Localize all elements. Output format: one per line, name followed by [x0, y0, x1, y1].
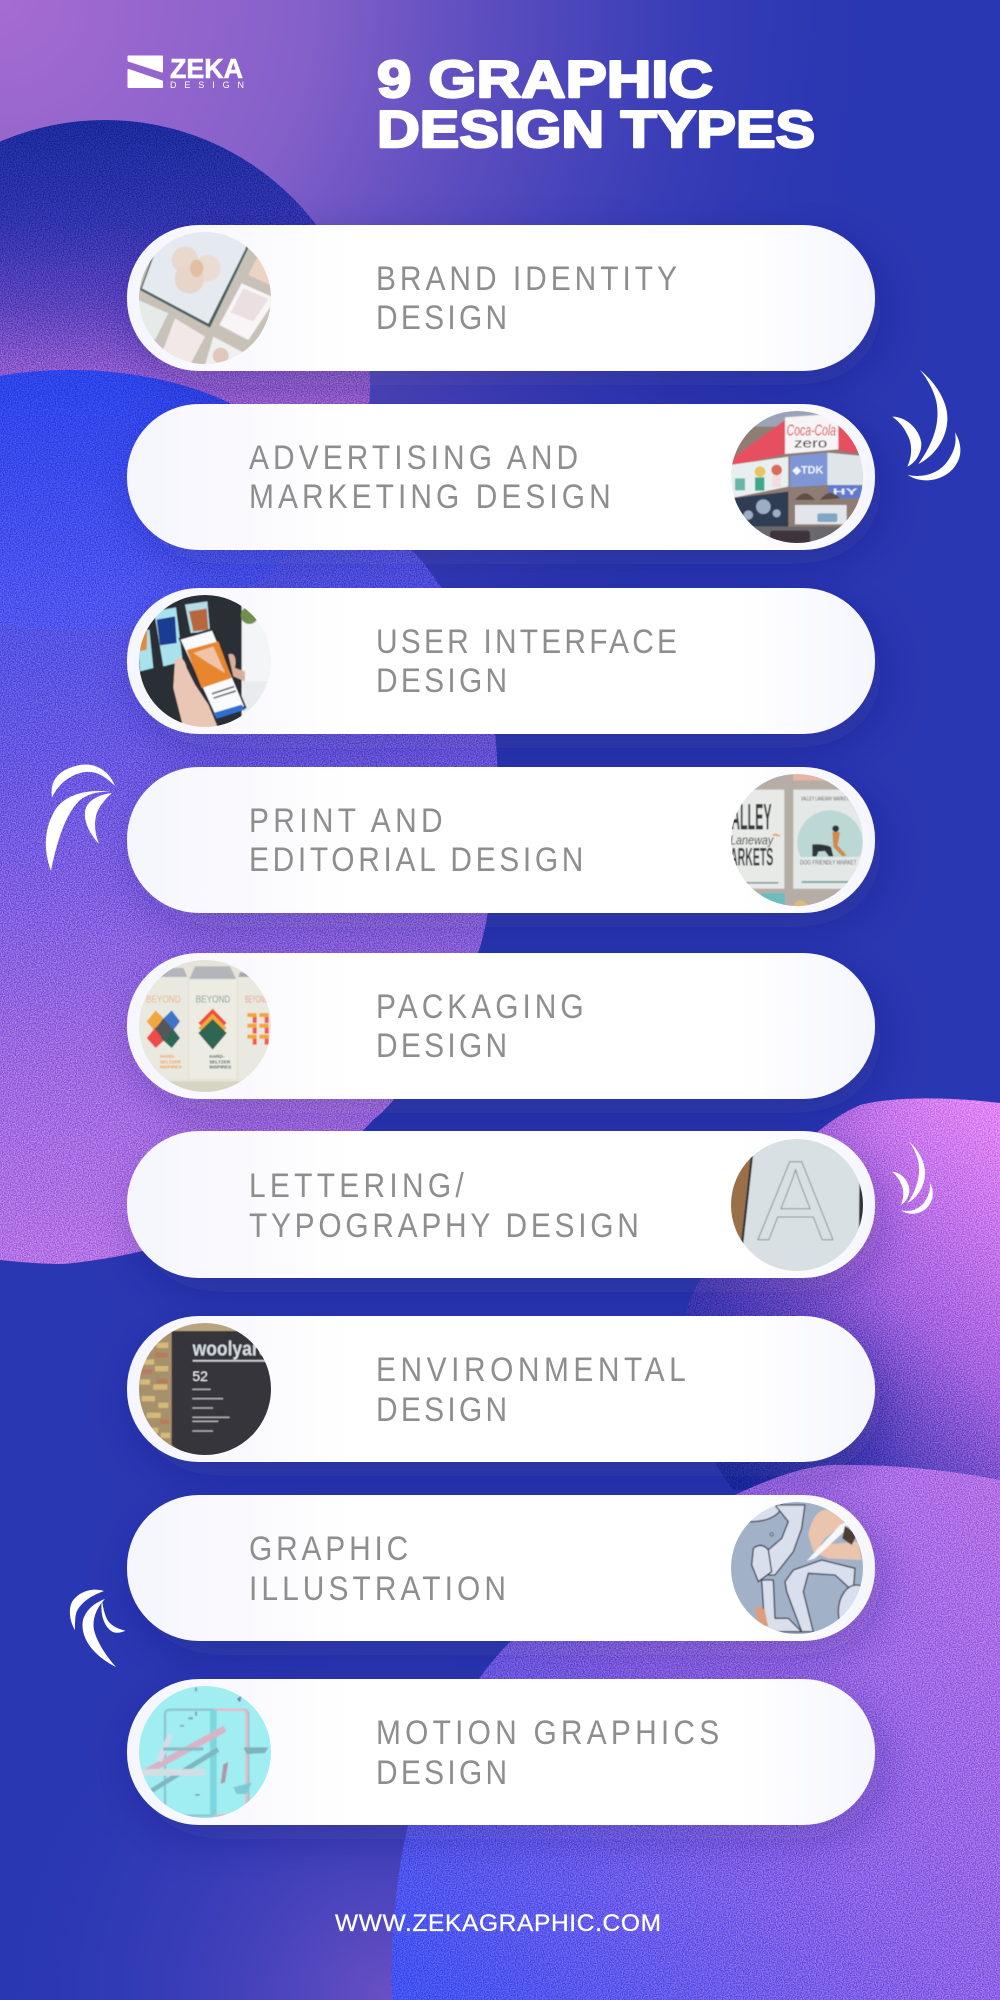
photo: Woolyard sign on brick: 52 — [192, 1368, 208, 1384]
label — [376, 1350, 686, 1428]
pill shape — [127, 767, 875, 913]
title line 2: DESIGN TYPES — [377, 101, 815, 159]
label: ADVERTISING AND — [249, 438, 578, 476]
label: PRINT AND — [249, 801, 443, 839]
label: EDITORIAL DESIGN — [249, 840, 583, 878]
background blob: large blue to purple left — [0, 463, 497, 1264]
photo: Beyond cans — [139, 960, 271, 1092]
photo: hand drawn letter A: A — [758, 1138, 834, 1265]
pill: lettering typography design — [127, 1131, 875, 1278]
pill shape — [127, 225, 875, 371]
photo: brand identity stationery — [139, 232, 271, 364]
label — [249, 1166, 639, 1244]
pill: print and editorial design — [127, 767, 875, 913]
label: DESIGN — [376, 1390, 507, 1428]
label — [249, 1529, 506, 1607]
pill: environmental design — [127, 1316, 875, 1462]
pill: packaging design — [127, 953, 875, 1099]
background blob: pink to navy right — [683, 1098, 1000, 1490]
decoration: left swirl — [46, 764, 115, 871]
label: TYPOGRAPHY DESIGN — [249, 1206, 639, 1244]
photo: Woolyard sign on brick — [139, 1323, 271, 1455]
label: BRAND IDENTITY — [376, 259, 677, 297]
background blob: bright blue left — [0, 370, 310, 630]
photo: Beyond cans: HARD- — [209, 1054, 225, 1059]
pill shape — [127, 588, 875, 734]
decoration: top right swirl — [892, 370, 960, 480]
logo mark — [128, 56, 162, 87]
label: ILLUSTRATION — [249, 1569, 506, 1607]
photo: billboards at Piccadilly: zero — [794, 436, 827, 450]
photo: market posters: VALLEY LANEWAY MARKETS — [801, 796, 851, 802]
label: DESIGN — [376, 298, 507, 336]
photo: Woolyard sign on brick: woolyard — [192, 1338, 269, 1360]
photo: Beyond cans: BEYOND — [146, 994, 181, 1005]
label: DESIGN — [376, 1026, 507, 1064]
pill: brand identity design — [127, 225, 875, 371]
logo subtitle: DESIGN — [170, 80, 244, 90]
photo: market posters: Laneway — [730, 833, 774, 847]
background blob: dark blue top left — [0, 120, 370, 650]
title — [377, 51, 815, 159]
background blob: purple bottom right — [392, 1465, 1000, 2000]
photo: market posters — [731, 774, 863, 906]
photo: hand drawn letter A — [731, 1139, 863, 1271]
pill shape — [127, 1131, 875, 1278]
label — [376, 622, 677, 699]
footer website: WWW.ZEKAGRAPHIC.COM — [335, 1910, 661, 1937]
photo: phone held over UI screens — [139, 595, 271, 727]
label: DESIGN — [376, 1753, 507, 1791]
photo: market posters: ARKETS — [730, 844, 773, 871]
pill shape — [127, 1316, 875, 1462]
pill: motion graphics design — [127, 1679, 875, 1825]
photo: Beyond cans: INSPIRES — [160, 1065, 182, 1070]
logo: Zeka Design — [128, 53, 244, 90]
photo: Beyond cans: SELTZER — [209, 1059, 231, 1064]
label — [249, 438, 611, 515]
pill: graphic illustration — [127, 1488, 875, 1641]
label: MOTION GRAPHICS — [376, 1713, 719, 1751]
decoration: right swirl small — [892, 1141, 933, 1214]
photo: Beyond cans: SELTZER — [160, 1059, 182, 1064]
photo: market posters: ALLEY — [731, 797, 772, 838]
decoration: lower left swirl — [70, 1590, 126, 1667]
photo: Beyond cans: INSPIRES — [209, 1065, 231, 1070]
photo: Beyond cans: BEYOND — [196, 994, 230, 1005]
label: DESIGN — [376, 661, 507, 699]
label — [376, 259, 677, 336]
photo: billboards at Piccadilly — [731, 411, 863, 543]
logo wordmark: ZEKA — [170, 53, 243, 84]
photo: billboards at Piccadilly: ◆TDK — [792, 464, 824, 476]
pill shape — [127, 1679, 875, 1825]
label: GRAPHIC — [249, 1529, 408, 1567]
pill shape — [127, 1495, 875, 1641]
photo: billboards at Piccadilly: Coca-Cola — [787, 422, 836, 439]
label — [249, 801, 583, 878]
label: ENVIRONMENTAL — [376, 1350, 686, 1388]
pill: user interface design — [127, 588, 875, 734]
photo: market posters: DOG FRIENDLY MARKET — [800, 859, 857, 866]
label — [376, 987, 584, 1064]
pill shape — [127, 404, 875, 550]
photo: Beyond cans: BEYOND — [245, 994, 268, 1005]
pill: advertising and marketing design — [127, 403, 875, 550]
photo: 3D exploding phone frame — [139, 1686, 271, 1818]
label — [376, 1713, 719, 1791]
label: LETTERING/ — [249, 1166, 464, 1204]
pill shape — [127, 953, 875, 1099]
photo: hand inking illustration — [731, 1502, 863, 1634]
label: USER INTERFACE — [376, 622, 677, 660]
label: MARKETING DESIGN — [249, 477, 611, 515]
label: PACKAGING — [376, 987, 584, 1025]
photo: Beyond cans: HARD- — [160, 1054, 175, 1059]
title line 1: 9 GRAPHIC — [377, 51, 713, 109]
photo: billboards at Piccadilly: HY — [833, 487, 859, 496]
